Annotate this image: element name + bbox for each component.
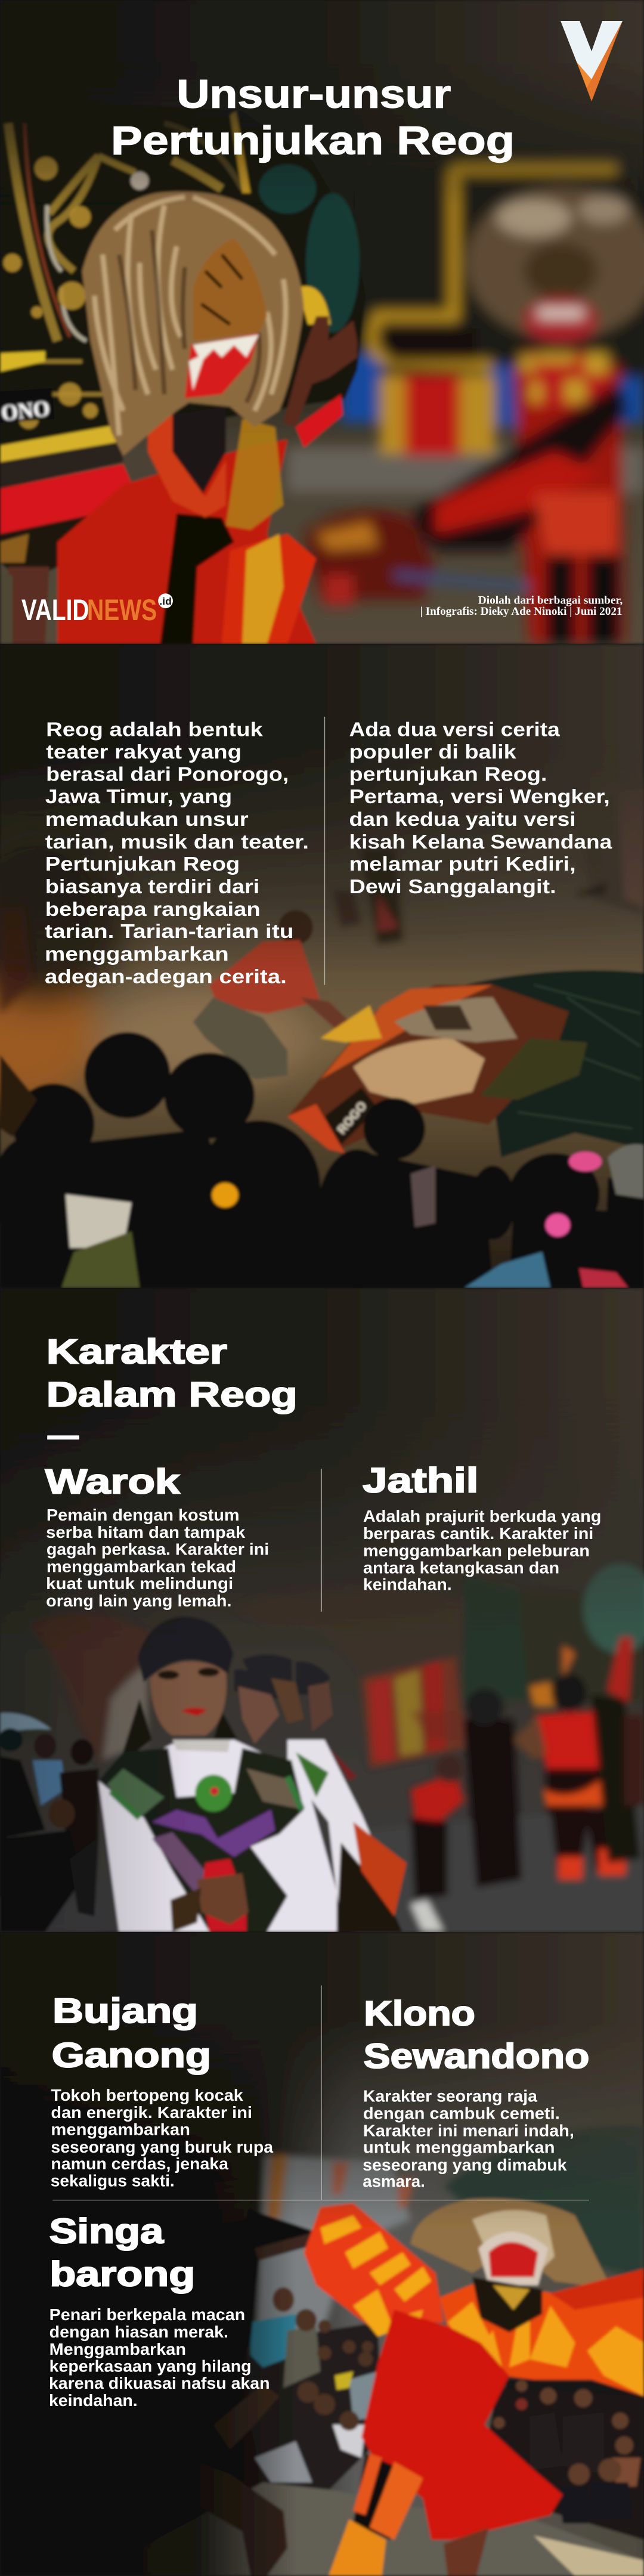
big mask panel <box>0 98 366 456</box>
text: two story versions: Dewi Sanggalangit. <box>349 875 556 898</box>
text: Singa barong: karena dikuasai nafsu akan <box>49 2374 270 2392</box>
crowd <box>246 2287 644 2540</box>
text: two story versions: pertunjukan Reog. <box>349 763 547 785</box>
panel: characters Warok and Jathil <box>0 1288 644 1932</box>
blue umbrella and left crowd <box>0 1713 98 1932</box>
text: Reog description: memadukan unsur <box>45 808 249 831</box>
text: Klono Sewandono: Karakter seorang raja <box>363 2086 538 2105</box>
text: Warok <box>45 1462 269 1610</box>
text: Bujang Ganong: dan energik. Karakter ini <box>51 2103 252 2122</box>
text: two story versions: Ada dua versi cerita <box>349 718 560 741</box>
top dark overlay <box>0 1288 644 1932</box>
audience heads <box>0 1032 644 1289</box>
text: two story versions: Pertama, versi Wengker, <box>349 785 610 808</box>
text: Warok: Pemain dengan kostum <box>47 1506 240 1524</box>
text: Klono Sewandono: Sewandono <box>364 2037 589 2076</box>
text: Reog description: biasanya terdiri dari <box>45 875 259 898</box>
panel: characters Ganong, Sewandono, Singa barong <box>49 1932 644 2576</box>
legs <box>353 2454 423 2540</box>
logo: VALIDNEWS: .id <box>159 596 172 607</box>
text: Jathil: Jathil <box>363 1461 478 1500</box>
text: Bujang Ganong: menggambarkan <box>51 2120 190 2138</box>
text: Singa barong <box>49 2212 270 2410</box>
photo: reog dancers: ONO <box>0 397 51 426</box>
text: Jathil: berparas cantik. Karakter ini <box>363 1524 593 1543</box>
necklace <box>172 407 226 497</box>
text: Warok: serba hitam dan tampak <box>46 1523 246 1541</box>
text: Reog description: menggambarkan <box>45 943 229 965</box>
text: two story versions: melamar putri Kediri, <box>349 853 576 875</box>
logo: VALIDNEWS: NEWS <box>87 593 157 627</box>
credit text <box>420 595 623 618</box>
top dark overlay <box>0 0 644 205</box>
text: Warok: menggambarkan tekad <box>47 1558 236 1576</box>
text: Klono Sewandono: dengan cambuk cemeti. <box>363 2104 560 2122</box>
mouth <box>185 333 259 398</box>
reog mask lying <box>287 985 569 1149</box>
red costume <box>57 439 316 644</box>
text: Bujang Ganong: Tokoh bertopeng kocak <box>51 2086 243 2104</box>
text: Klono Sewandono: asmara. <box>363 2172 425 2191</box>
text: Singa barong: dengan hiasan merak. <box>49 2323 228 2341</box>
text: two story versions <box>349 718 612 898</box>
face <box>150 1661 227 1736</box>
text: Singa barong: barong <box>49 2255 195 2294</box>
text: Reog description: berasal dari Ponorogo, <box>46 763 289 785</box>
text: Jathil: Adalah prajurit berkuda yang <box>363 1507 601 1525</box>
tiger face <box>193 238 267 341</box>
photo: reog mask on the ground with crowd: ROGO <box>335 1099 370 1137</box>
text: Bujang Ganong <box>51 1992 274 2190</box>
photo: reog mask on the ground with crowd <box>0 644 644 1289</box>
main dancer <box>119 1699 152 1764</box>
text: Reog description: tarian. Tarian-tarian itu <box>45 920 293 943</box>
text: Klono Sewandono: Karakter ini menari indah, <box>363 2121 574 2140</box>
credit text: | Infografis: Dieky Ade Ninoki | Juni 2021 <box>420 605 622 618</box>
text: Warok: kuat untuk melindungi <box>46 1574 233 1593</box>
red robe <box>361 2310 563 2540</box>
text: Warok: orang lain yang lemah. <box>46 1592 231 1610</box>
text: Jathil: menggambarkan peleburan <box>363 1541 590 1560</box>
text: Klono Sewandono: seseorang yang dimabuk <box>363 2156 567 2174</box>
logo: VALIDNEWS: VALID <box>21 593 89 627</box>
text: Warok: Warok <box>45 1462 180 1501</box>
text: Klono Sewandono <box>363 1994 589 2191</box>
text: Singa barong: keindahan. <box>49 2391 138 2410</box>
text: Klono Sewandono: Klono <box>364 1994 475 2033</box>
left dark fade <box>0 1932 644 2576</box>
text: Reog description: beberapa rangkaian <box>45 898 261 921</box>
text: Reog description: teater rakyat yang <box>46 741 242 763</box>
text: Reog description: adegan-adegan cerita. <box>45 965 287 988</box>
text: Reog description: Pertunjukan Reog <box>45 853 240 875</box>
text: Reog description: tarian, musik dan teater. <box>45 831 309 853</box>
arcs <box>29 1613 172 1769</box>
text: Bujang Ganong: seseorang yang buruk rupa <box>51 2138 274 2156</box>
panel: hero with title <box>0 0 644 644</box>
red fringe <box>0 464 135 536</box>
title <box>111 72 515 163</box>
text: Reog description: Jawa Timur, yang <box>45 785 232 808</box>
man on the left in dark <box>0 2178 316 2576</box>
text: two story versions: populer di balik <box>349 741 516 763</box>
man in red shirt <box>193 910 370 1079</box>
text: Jathil: antara ketangkasan dan <box>363 1559 559 1577</box>
text: Jathil <box>363 1461 601 1593</box>
mane <box>82 191 304 456</box>
text: Singa barong: Singa <box>49 2212 164 2250</box>
hand <box>283 316 357 427</box>
text: Bujang Ganong: sekaligus sakti. <box>51 2171 175 2190</box>
text: Singa barong: keperkasaan yang hilang <box>49 2357 252 2376</box>
text: Bujang Ganong: namun cerdas, jenaka <box>51 2154 229 2173</box>
text: Reog description: Reog adalah bentuk <box>46 718 263 741</box>
heading: Karakter Dalam Reog: Dalam Reog <box>47 1375 298 1414</box>
heading: Karakter Dalam Reog: Karakter <box>47 1333 227 1371</box>
title: Unsur-unsur <box>177 72 451 116</box>
heading: Karakter Dalam Reog <box>47 1333 298 1439</box>
text: Singa barong: Menggambarkan <box>49 2340 186 2358</box>
yellow band <box>0 425 121 462</box>
top dark overlay <box>0 644 644 973</box>
logo: VALIDNEWS <box>21 593 173 627</box>
panel: intro text over performance photo <box>0 644 644 1288</box>
crowd on the right <box>464 1719 522 1888</box>
top dark overlay <box>0 1932 644 2228</box>
text: Jathil: keindahan. <box>363 1575 452 1593</box>
text: Warok: gagah perkasa. Karakter ini <box>47 1540 269 1559</box>
back dancers <box>242 1655 292 1699</box>
title: Pertunjukan Reog <box>111 119 515 163</box>
photo: jathil dancers <box>0 1288 644 1932</box>
face ornament <box>472 2277 542 2333</box>
wings <box>304 2203 444 2326</box>
ground <box>140 2482 644 2576</box>
text: Bujang Ganong: Ganong <box>52 2036 211 2075</box>
photo: singa barong dancer with crowd <box>156 1932 644 2576</box>
text: Klono Sewandono: untuk menggambarkan <box>363 2138 555 2157</box>
text: two story versions: dan kedua yaitu versi <box>349 808 576 831</box>
peacock feathers <box>464 970 644 1157</box>
text: Bujang Ganong: Bujang <box>52 1992 198 2030</box>
lion mask <box>411 2199 612 2289</box>
credit text: Diolah dari berbagai sumber, <box>478 595 623 607</box>
text: Singa barong: Penari berkepala macan <box>49 2305 245 2324</box>
road <box>353 1806 644 1932</box>
photo: reog dancers <box>0 0 644 644</box>
icon: V logo <box>561 21 623 101</box>
text: Reog description <box>45 718 309 988</box>
text: two story versions: kisah Kelana Sewandana <box>349 831 612 853</box>
